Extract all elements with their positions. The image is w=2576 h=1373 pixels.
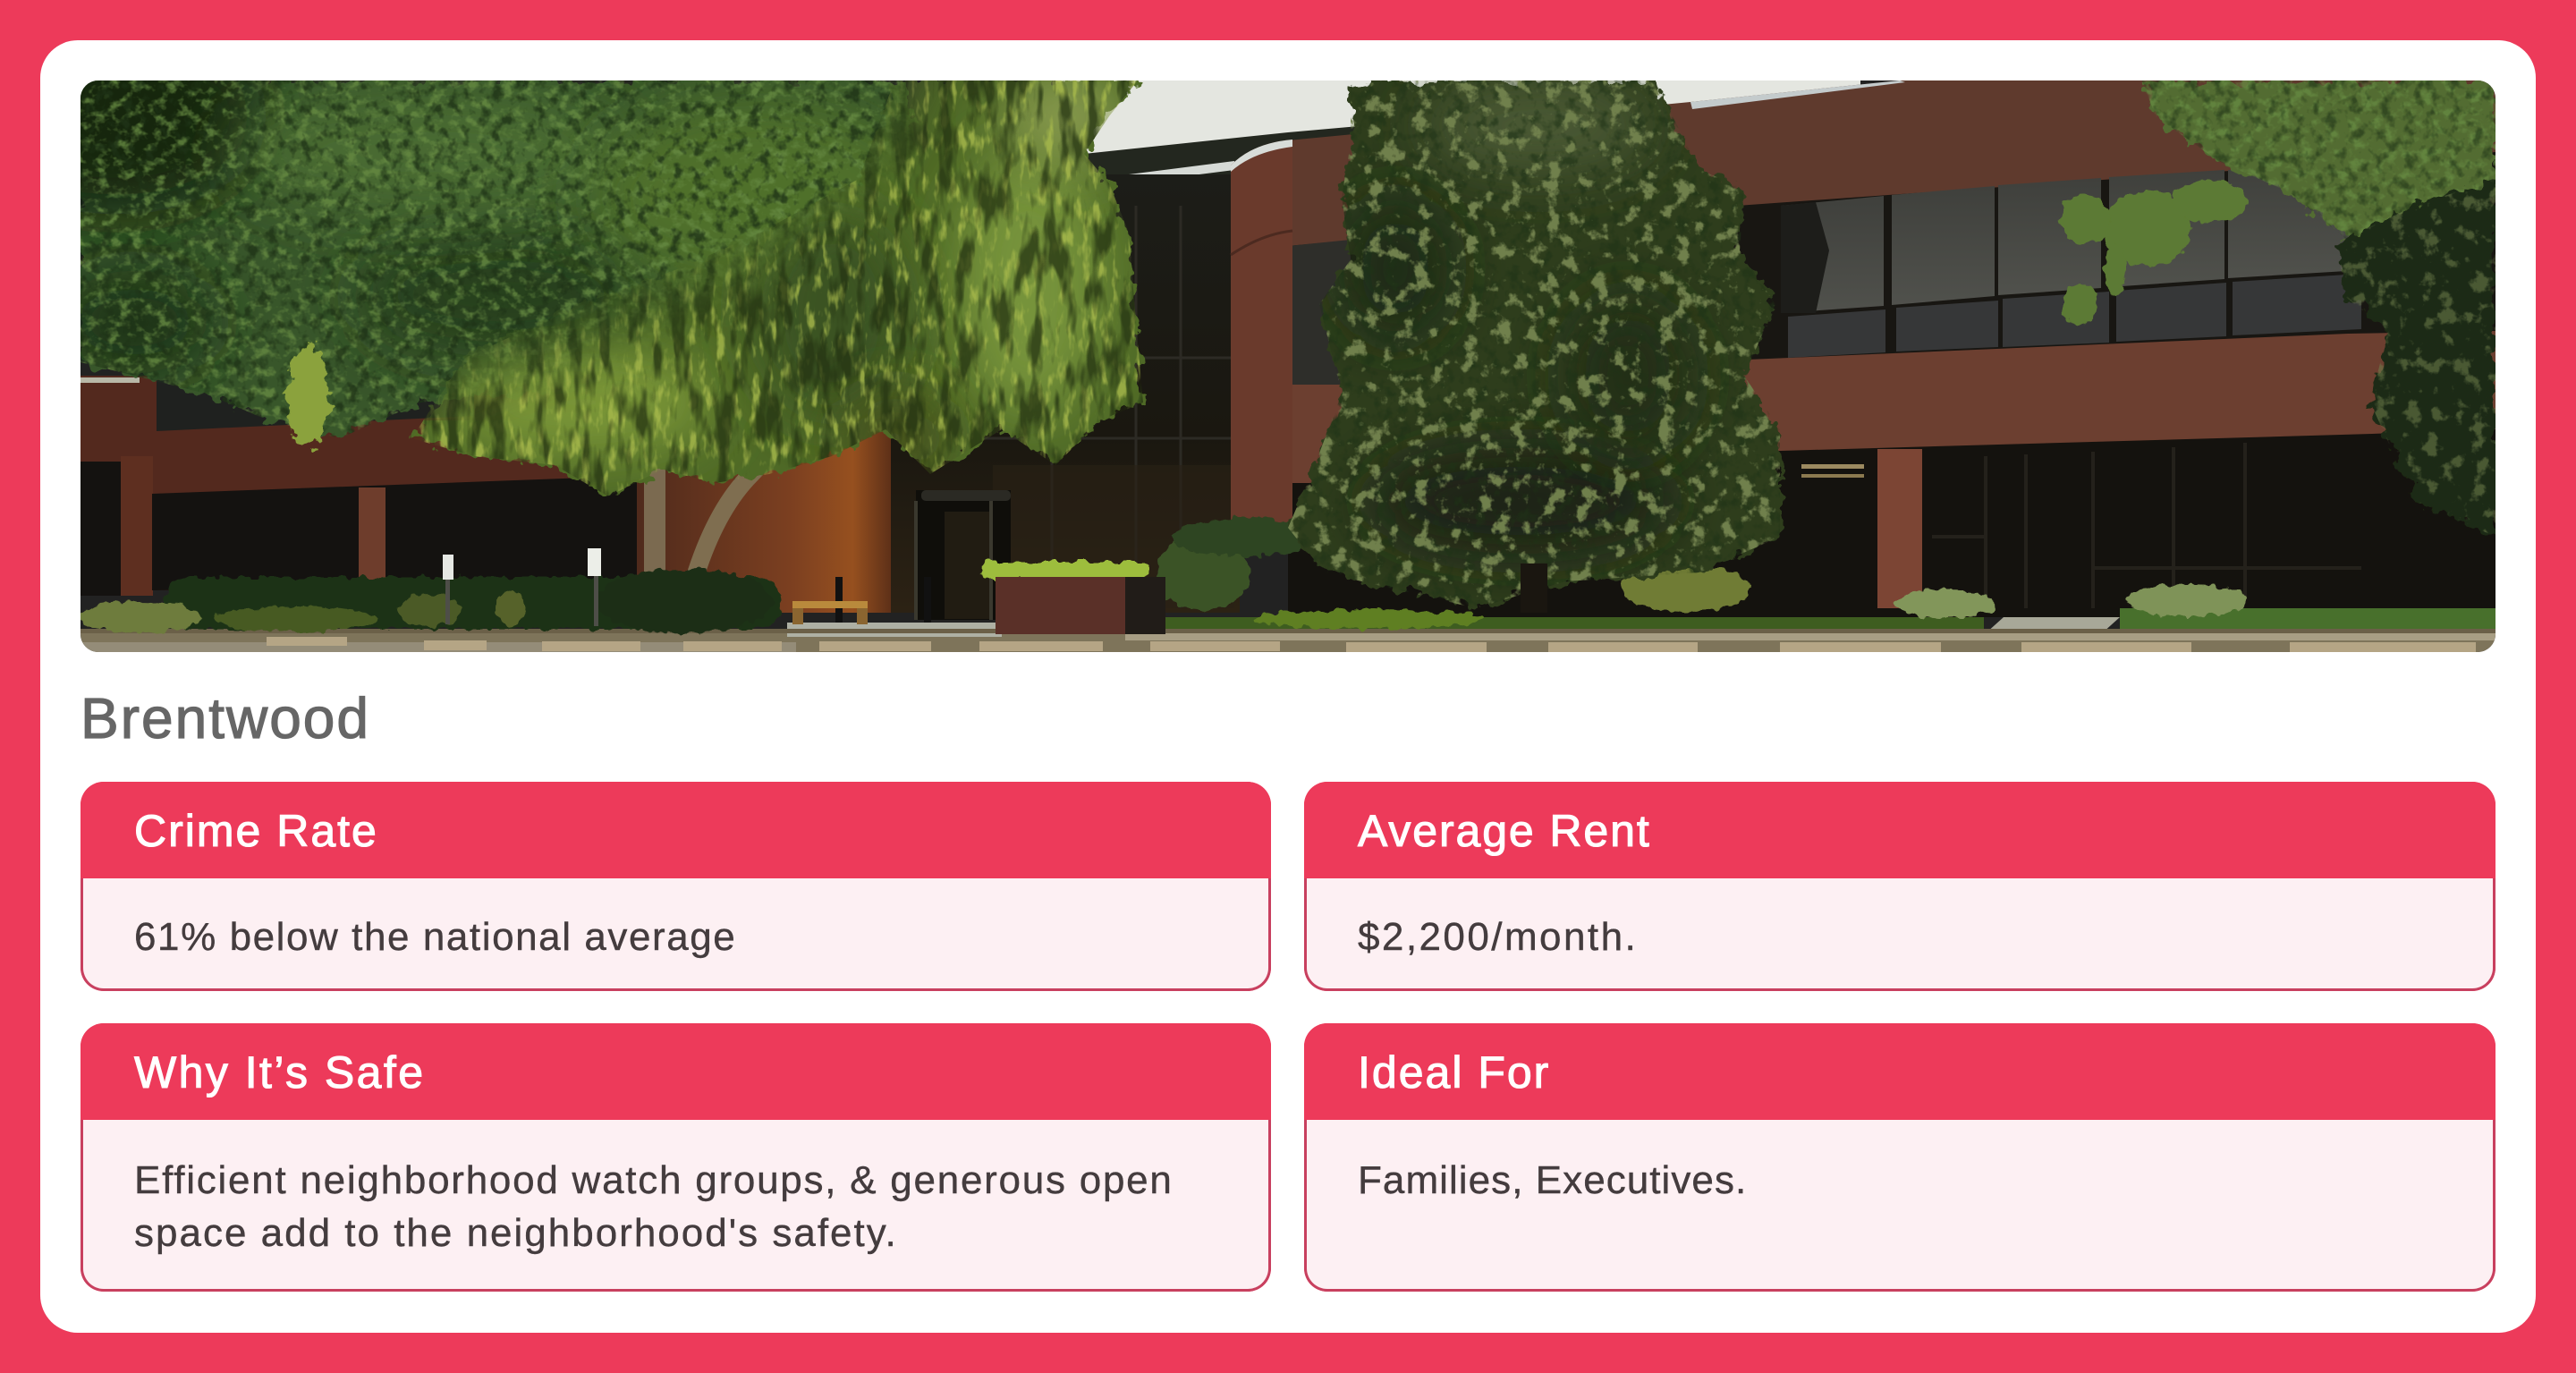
panel header: why it's safe xyxy=(80,1023,1271,1120)
panel: average rent xyxy=(1304,782,2496,991)
panel header: average rent: Average Rent xyxy=(1358,806,1651,856)
panel: why it's safe xyxy=(80,1023,1271,1292)
panel header: ideal for xyxy=(1304,1023,2496,1120)
panel header: ideal for: Ideal For xyxy=(1358,1047,1550,1098)
tree: dark left canopy xyxy=(80,81,919,438)
heading: Brentwood: Brentwood xyxy=(80,686,370,750)
panel text: ideal for: Families, Executives. xyxy=(1358,1158,1747,1202)
building: left wing xyxy=(80,367,644,596)
panel: ideal for xyxy=(1304,1023,2496,1292)
parking signs xyxy=(443,548,601,626)
planter box xyxy=(996,577,1165,634)
panel header: crime rate xyxy=(80,782,1271,878)
tree trunks xyxy=(644,385,809,581)
panel text: crime rate: 61% below the national average xyxy=(134,915,736,959)
tree: magnolia xyxy=(1288,81,1780,613)
tree: right branch over windows xyxy=(2059,81,2496,326)
panel body: crime rate xyxy=(80,878,1271,991)
building: brick right wing xyxy=(1288,81,2496,617)
panel text: average rent: $2,200/month. xyxy=(1358,915,1638,959)
panel text: why it's safe: space add to the neighborhood's safety. xyxy=(134,1211,898,1255)
building: curved brick tower xyxy=(1231,140,1355,528)
hedges and shrubs xyxy=(76,517,2248,633)
panel header: why it's safe: Why It’s Safe xyxy=(134,1047,425,1098)
panel header: average rent xyxy=(1304,782,2496,878)
panel text: why it's safe: Efficient neighborhood watch groups, & generous open xyxy=(134,1158,1174,1202)
panel body: ideal for xyxy=(1304,1120,2496,1292)
building: sunlit orange wall xyxy=(637,340,891,613)
photo: Brentwood office building behind trees xyxy=(80,81,2496,652)
tree: dark right foliage xyxy=(2339,179,2496,537)
panel text: why it's safe xyxy=(134,1158,1174,1255)
panel header: crime rate: Crime Rate xyxy=(134,806,378,856)
bench xyxy=(792,601,868,624)
building: central glass atrium xyxy=(891,125,1368,613)
ground: curb, sidewalk and grass xyxy=(80,608,2496,652)
revolving door xyxy=(835,490,1011,631)
panel body: average rent xyxy=(1304,878,2496,991)
panel body: why it's safe xyxy=(80,1120,1271,1292)
panel: crime rate xyxy=(80,782,1271,991)
tree: sunlit willow xyxy=(289,72,1143,496)
sky xyxy=(1055,81,1860,188)
